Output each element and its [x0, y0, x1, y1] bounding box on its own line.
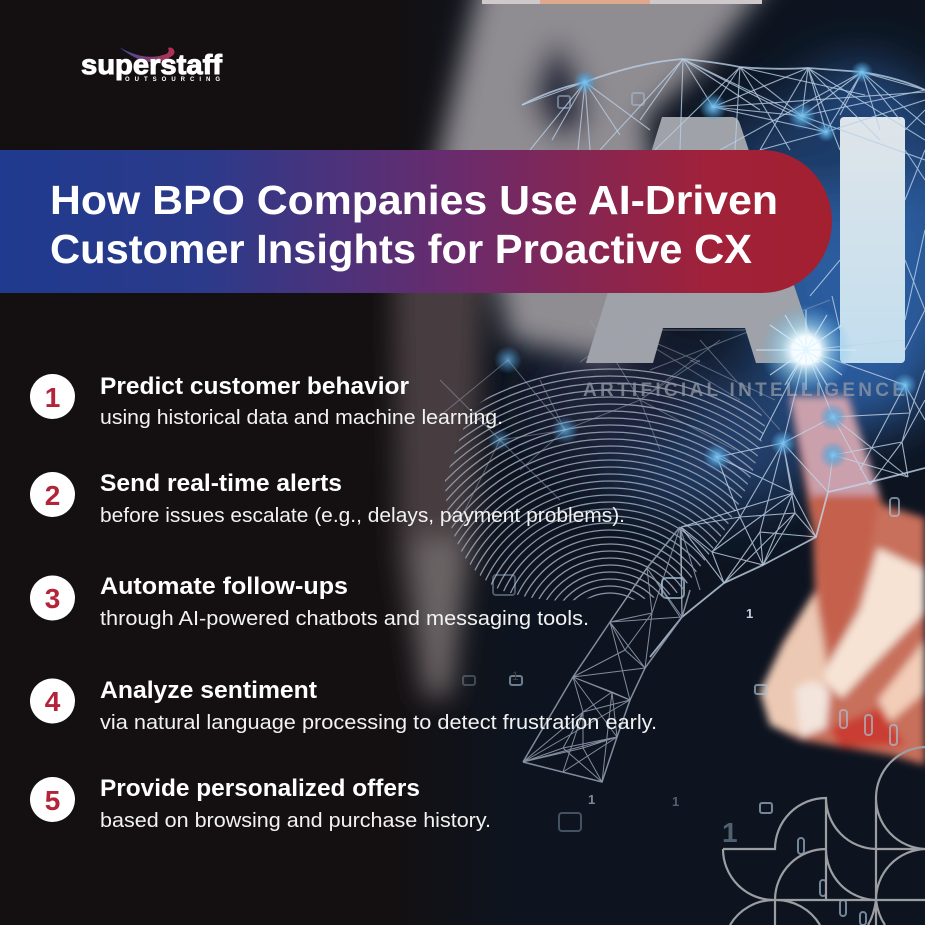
number badge 2: 2 — [45, 480, 60, 511]
item 4: via natural language processing to detect frustration early. — [100, 712, 657, 734]
item 3 — [30, 573, 589, 630]
background photo: 1 — [746, 606, 753, 621]
network mesh: left globe — [435, 300, 830, 520]
number badge 5 — [30, 777, 75, 822]
logo: superstaff outsourcing: superstaff — [81, 49, 223, 80]
hand — [760, 396, 925, 765]
item 5: based on browsing and purchase history. — [100, 810, 491, 832]
top strip — [482, 0, 762, 4]
item 4: Analyze sentiment — [100, 677, 317, 704]
lens flare — [756, 304, 856, 396]
item 2: Send real-time alerts — [100, 470, 342, 497]
background photo: 1 — [672, 794, 679, 809]
left dark fade — [0, 0, 520, 925]
item 3: Automate follow-ups — [100, 573, 348, 600]
item 1: using historical data and machine learning. — [100, 407, 503, 429]
background photo: 1 — [722, 817, 738, 848]
number badge 5: 5 — [45, 785, 60, 816]
item 5: Provide personalized offers — [100, 775, 420, 802]
AI letter A — [586, 117, 820, 363]
number badge 1: 1 — [45, 382, 60, 413]
artificial intelligence label: ARTIFICIAL INTELLIGENCE — [583, 380, 905, 401]
geometric corner outline — [723, 747, 925, 925]
item 1 — [30, 373, 503, 429]
blurred shirt — [392, 0, 785, 700]
number badge 3: 3 — [45, 583, 60, 614]
network mesh: top — [522, 59, 925, 330]
digits floating — [463, 93, 899, 925]
background photo — [381, 0, 925, 925]
logo swoosh — [119, 47, 174, 62]
logo: superstaff outsourcing: OUTSOURCING — [125, 77, 220, 83]
network mesh: lower finger — [523, 527, 700, 782]
blue glow behind network — [530, 70, 925, 510]
item 4 — [30, 677, 657, 734]
AI letter I — [840, 117, 905, 363]
number badge 4 — [30, 678, 75, 724]
title — [50, 177, 778, 272]
title: Customer Insights for Proactive CX — [50, 226, 752, 272]
item 2: before issues escalate (e.g., delays, payment problems). — [100, 505, 625, 527]
title: How BPO Companies Use AI-Driven — [50, 177, 778, 223]
item 1: Predict customer behavior — [100, 373, 409, 400]
item 3: through AI-powered chatbots and messaging tools. — [100, 608, 589, 630]
background photo: 1 — [588, 792, 595, 807]
background photo: 1 — [512, 669, 519, 683]
item 5 — [30, 775, 491, 832]
number badge 2 — [30, 472, 75, 517]
number badge 4: 4 — [45, 686, 61, 717]
number badge 3 — [30, 576, 75, 620]
title banner — [0, 150, 832, 293]
network hub glows — [488, 61, 917, 471]
network mesh: right and lower globe — [650, 310, 925, 657]
fingerprint — [445, 368, 765, 601]
item 2 — [30, 470, 625, 527]
number badge 1 — [30, 374, 75, 419]
